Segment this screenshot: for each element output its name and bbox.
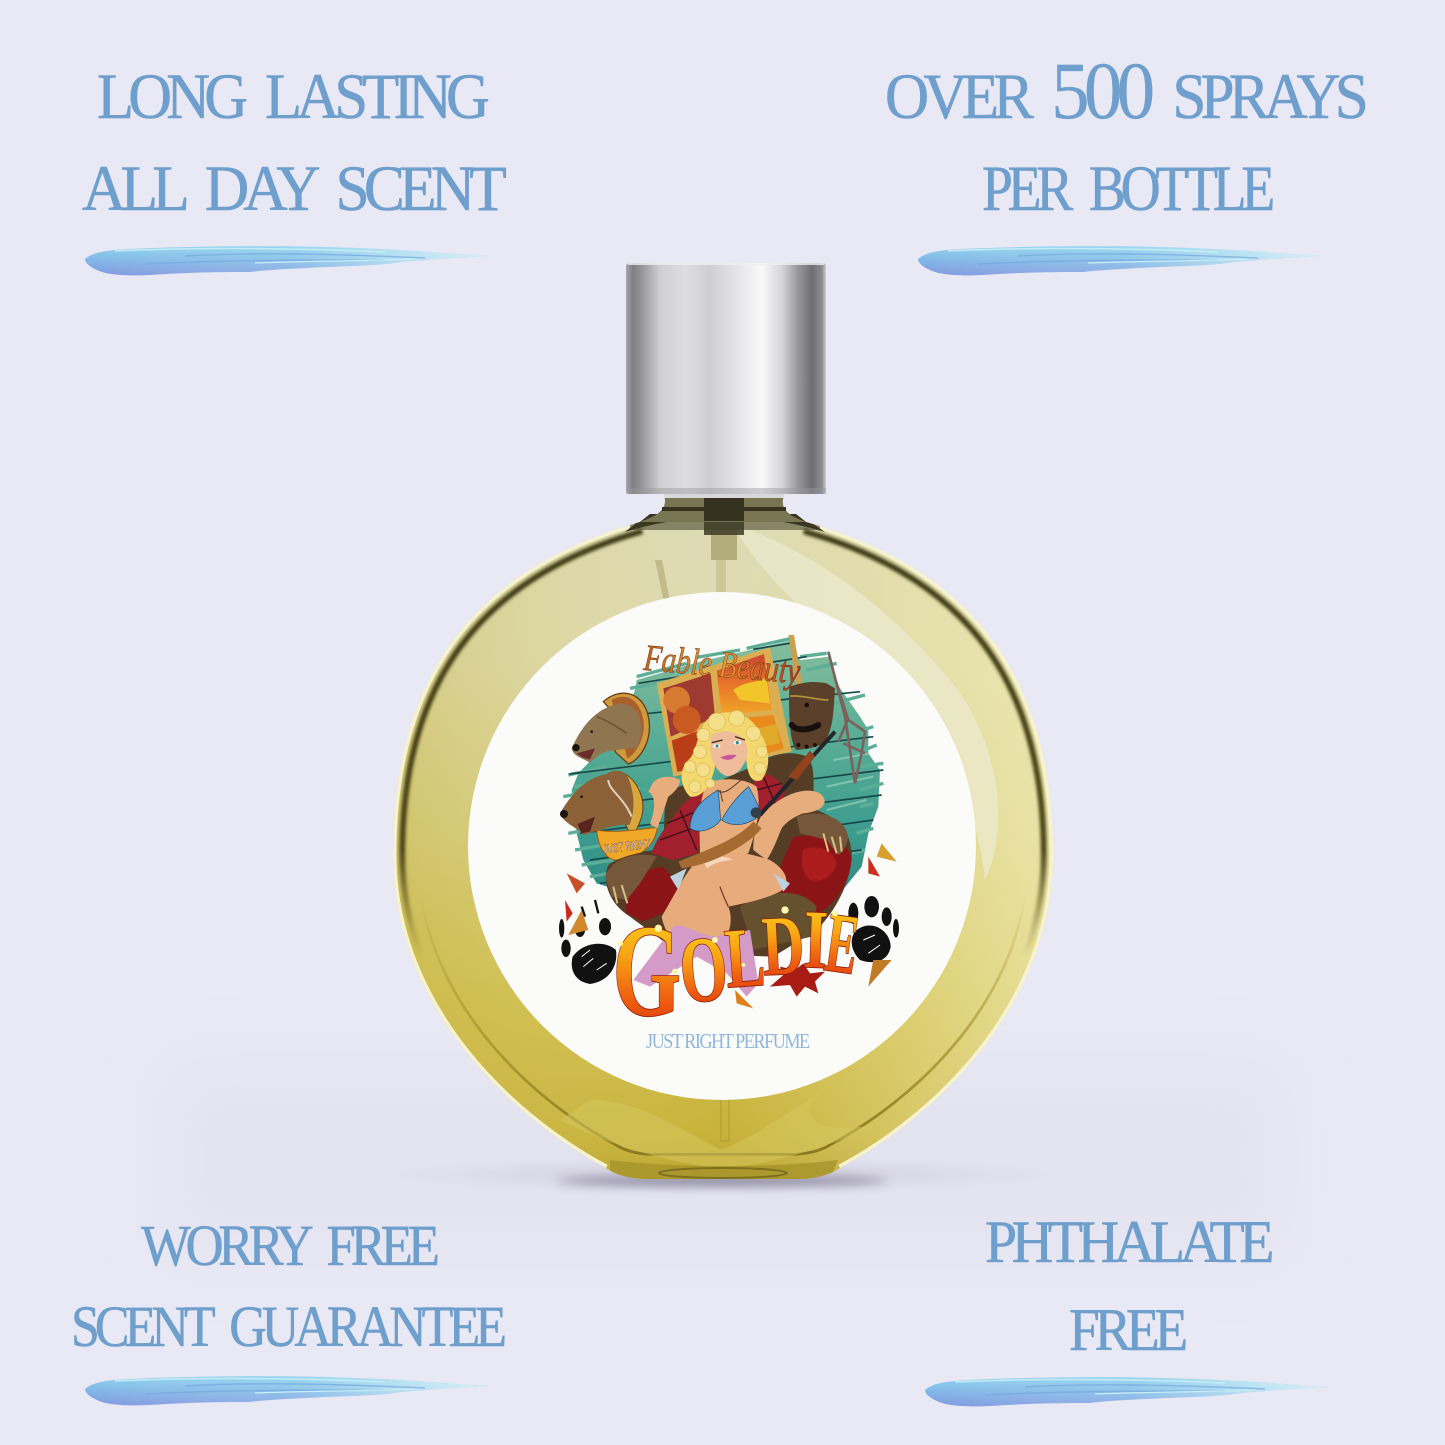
label illustration: Goldie character art xyxy=(559,635,899,1053)
goldie title xyxy=(613,894,864,1044)
denim shorts xyxy=(670,868,790,892)
paw print left xyxy=(559,900,616,984)
goldie title: G xyxy=(613,899,681,1044)
crossbow xyxy=(828,652,865,783)
paw print right xyxy=(848,896,899,962)
necklace xyxy=(717,779,742,802)
just right perfume caption: JUST RIGHT PERFUME xyxy=(646,1031,810,1053)
face xyxy=(710,731,747,776)
goldie title: O xyxy=(676,917,732,1023)
feature: phthalate free: FREE xyxy=(1069,1297,1186,1363)
round white label xyxy=(468,592,976,1100)
goldie title: E xyxy=(820,895,864,993)
bottle glass body xyxy=(380,490,1070,1190)
feature: long lasting all day scent xyxy=(82,61,506,275)
feature: worry free scent guarantee: SCENT GUARANTEE xyxy=(71,1294,505,1359)
goldie title: D xyxy=(760,898,806,994)
woman figure xyxy=(633,710,835,997)
torso and arms xyxy=(648,777,825,860)
bear fur armchair xyxy=(605,753,852,957)
floor shadow xyxy=(170,1070,1280,1250)
mounted bear head lower xyxy=(560,771,643,837)
autumn leaves xyxy=(565,843,897,1008)
goldie title: L xyxy=(722,910,768,1006)
bottle neck xyxy=(640,495,806,522)
red flannel shirt xyxy=(652,774,785,860)
feature: long lasting all day scent: ALL DAY SCENT xyxy=(82,153,506,225)
window post xyxy=(788,635,803,693)
teal wood wall xyxy=(563,638,883,897)
blonde hair xyxy=(682,710,768,797)
just right bowl xyxy=(597,827,657,860)
mounted bear head top xyxy=(572,693,649,764)
cowboy boot xyxy=(633,926,758,997)
bear head top right xyxy=(789,682,835,750)
feature: over 500 sprays per bottle xyxy=(885,45,1366,275)
perfume bottle xyxy=(380,263,1070,1190)
rifle xyxy=(678,732,835,868)
cabin window xyxy=(657,647,792,777)
feature: phthalate free xyxy=(925,1209,1330,1406)
blue bikini xyxy=(690,787,762,831)
fable beauty script logo: Fable Beauty xyxy=(641,638,802,692)
feature: over 500 sprays per bottle: PER BOTTLE xyxy=(982,153,1273,225)
goldie title: I xyxy=(802,894,829,987)
feature: worry free scent guarantee: WORRY FREE xyxy=(141,1213,438,1278)
feature: worry free scent guarantee xyxy=(71,1213,505,1405)
feature: over 500 sprays per bottle: OVER 500 SPRAYS xyxy=(885,45,1366,136)
just right bowl: JUST RIGHT xyxy=(603,837,652,856)
feature: phthalate free: PHTHALATE xyxy=(985,1209,1272,1275)
legs xyxy=(662,851,786,953)
silver cap xyxy=(626,263,826,498)
feature: long lasting all day scent: LONG LASTING xyxy=(97,61,488,133)
title sparkles xyxy=(617,906,838,975)
